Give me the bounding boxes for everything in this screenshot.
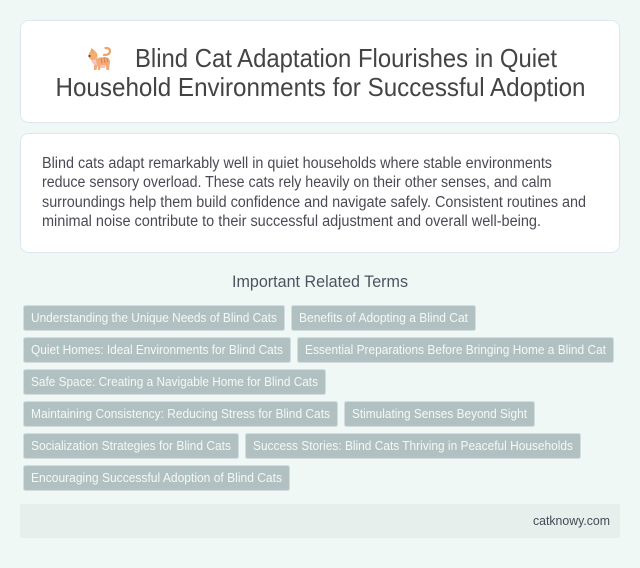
tag [24, 466, 290, 490]
tag: Understanding the Unique Needs of Blind Cats [31, 311, 277, 325]
tag [24, 370, 326, 394]
icon: orange cat [88, 48, 110, 70]
title: Blind Cat Adaptation Flourishes in Quiet [135, 43, 558, 73]
tag: Maintaining Consistency: Reducing Stress for Blind Cats [31, 407, 330, 421]
tag: Encouraging Successful Adoption of Blind Cats [31, 471, 282, 485]
panel: term tags [24, 306, 614, 490]
tag: Success Stories: Blind Cats Thriving in Peaceful Households [253, 439, 573, 453]
footer: catknowy.com [533, 513, 610, 528]
tag [344, 402, 534, 426]
tag [24, 402, 338, 426]
title [56, 43, 586, 102]
heading: related terms: Important Related Terms [232, 273, 408, 291]
tag [24, 338, 290, 362]
tag [24, 306, 284, 330]
title: Household Environments for Successful Adoption [56, 72, 586, 102]
tag: Socialization Strategies for Blind Cats [31, 439, 231, 453]
panel: title card [20, 20, 620, 122]
tag [298, 338, 614, 362]
text block: description: minimal noise contribute to their successful adjustment and overall well-being. [42, 213, 541, 230]
tag [292, 306, 476, 330]
text block: description: surroundings help them build confidence and navigate safely. Consistent routines and [42, 194, 586, 211]
text block: description [42, 155, 586, 230]
tag [24, 434, 238, 458]
tag: Benefits of Adopting a Blind Cat [299, 311, 468, 325]
footer [20, 504, 620, 538]
panel: description [20, 134, 620, 252]
tag: Safe Space: Creating a Navigable Home for Blind Cats [31, 375, 318, 389]
tag: Quiet Homes: Ideal Environments for Blind Cats [31, 343, 283, 357]
text block: description: Blind cats adapt remarkably well in quiet households where stable environments [42, 155, 552, 172]
text block: description: reduce sensory overload. These cats rely heavily on their other senses, and calm [42, 174, 552, 191]
tag: Stimulating Senses Beyond Sight [352, 407, 527, 421]
tag [246, 434, 580, 458]
tag: Essential Preparations Before Bringing Home a Blind Cat [305, 343, 606, 357]
